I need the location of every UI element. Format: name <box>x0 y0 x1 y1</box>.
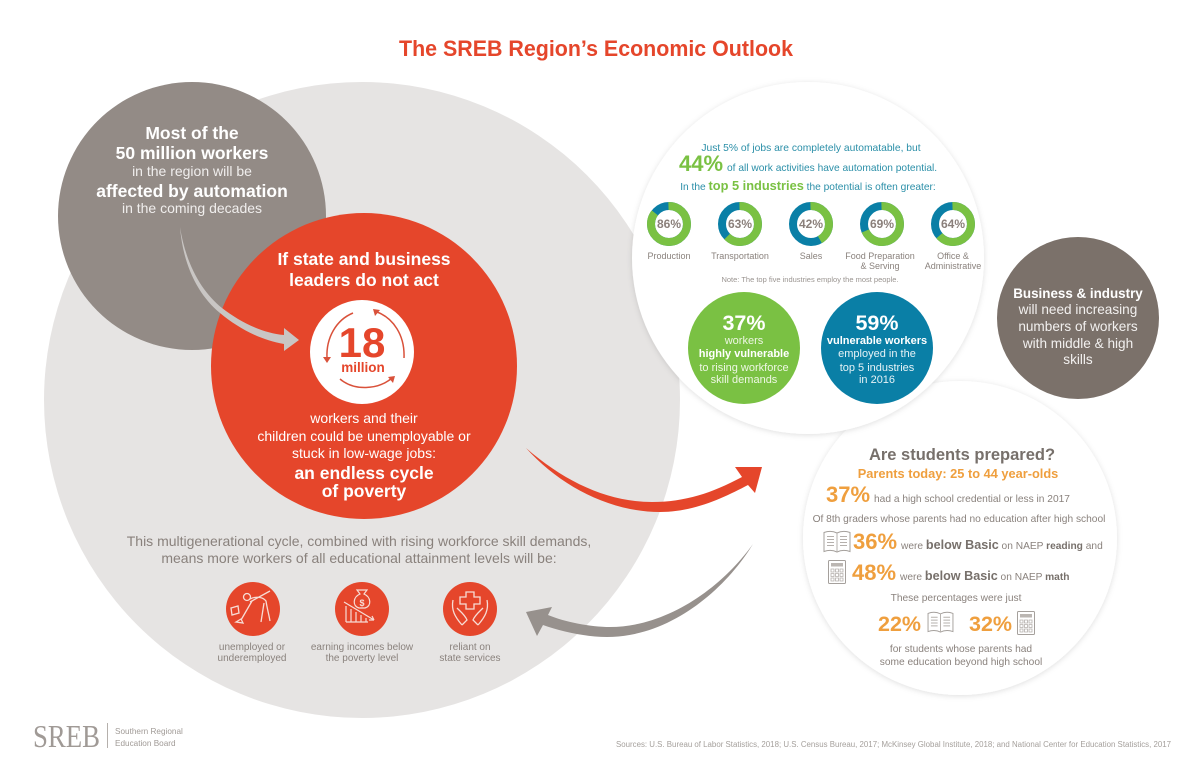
panel: if leaders do not act: workers and their <box>309 410 418 426</box>
logo: Education Board <box>115 739 176 748</box>
logo: Southern Regional <box>115 727 183 736</box>
label: state services <box>439 642 501 664</box>
donut: sales <box>793 206 829 261</box>
text block: multigenerational cycle: means more workers of all educational attainment levels will be: <box>161 550 557 566</box>
callout: 18 million: 18 <box>339 319 385 366</box>
callout: 18 million <box>310 300 414 404</box>
icon: unemployed or underemployed <box>226 582 280 636</box>
stat: 36 percent reading: were <box>900 541 926 552</box>
donut: production <box>647 206 691 261</box>
text: students whose parents: some education beyond high school <box>880 657 1042 668</box>
label: state services: reliant on <box>449 642 491 653</box>
stat circle: 37 percent: to rising workforce <box>699 362 789 374</box>
label: poverty level <box>311 642 414 664</box>
donut: production: Production <box>647 251 691 261</box>
stat circle: 37 percent: 37% <box>722 311 766 335</box>
text: 44 percent: of all work activities have automation potential. <box>727 163 937 174</box>
icon: incomes below poverty level <box>335 582 389 636</box>
panel: business and industry: numbers of workers <box>1018 319 1138 334</box>
panel: if leaders do not act: leaders do not act <box>289 270 439 290</box>
panel: if leaders do not act: an endless cycle <box>294 463 434 483</box>
panel: if leaders do not act <box>211 213 517 519</box>
panel: business and industry: with middle & high <box>1022 336 1133 351</box>
icon: reliant on state services <box>443 582 497 636</box>
text block: multigenerational cycle <box>127 533 591 566</box>
panel: are students prepared <box>803 381 1117 695</box>
stat circle: 59 percent <box>821 292 933 404</box>
donut: office and administrative: 64% <box>941 217 965 231</box>
panel: automation circle: in the region will be <box>132 163 252 179</box>
donut: production: 86% <box>657 217 681 231</box>
panel: if leaders do not act: stuck in low-wage jobs: <box>292 445 436 461</box>
stat circle: 59 percent: in 2016 <box>859 374 895 386</box>
label: unemployed: unemployed or <box>219 642 286 653</box>
text: 5 percent of jobs: Just 5% of jobs are completely automatable, but <box>701 143 921 154</box>
label: poverty level: the poverty level <box>326 653 398 664</box>
text: students whose parents: for students whose parents had <box>890 644 1032 655</box>
donut: food preparation: 69% <box>870 217 894 231</box>
text: 8th graders: Of 8th graders whose parents had no education after high school <box>813 514 1105 525</box>
label: unemployed: underemployed <box>218 653 286 664</box>
stat: 22 percent: 22% <box>878 612 921 636</box>
donut: sales: Sales <box>800 251 823 261</box>
stat circle: 59 percent: 59% <box>855 311 899 335</box>
logo <box>33 718 183 754</box>
stat: 48 percent math: were <box>899 572 925 583</box>
panel: business and industry: skills <box>1063 352 1093 367</box>
stat circle: 59 percent: vulnerable workers <box>827 335 927 347</box>
donut: office and administrative: Office & <box>937 251 969 261</box>
stat: 36 percent reading: 36% <box>853 529 897 554</box>
icon: calculator small <box>1018 612 1034 634</box>
text: students whose parents <box>880 644 1042 668</box>
panel: automation circle: 50 million workers <box>116 143 269 163</box>
stat: 37 percent credential: had a high school credential or less in 2017 <box>874 494 1070 505</box>
stat circle: 37 percent: skill demands <box>711 374 778 386</box>
stat: 48 percent math: 48% <box>852 560 896 585</box>
panel: automation circle: in the coming decades <box>122 200 262 216</box>
stat circle: 37 percent <box>688 292 800 404</box>
text: 44 percent: 44% <box>679 151 723 176</box>
panel: business and industry: will need increasing <box>1018 302 1137 317</box>
label: state services: state services <box>439 653 501 664</box>
donut: transportation: Transportation <box>711 251 769 261</box>
callout: 18 million: million <box>341 360 385 375</box>
donut: transportation: 63% <box>728 217 752 231</box>
text: these percentages: These percentages were just <box>891 593 1022 604</box>
icon: book small <box>928 612 953 632</box>
stat: 37 percent credential: 37% <box>826 482 870 507</box>
stat: 36 percent reading: below Basic on NAEP reading and <box>926 538 1103 552</box>
icon: book <box>824 531 850 552</box>
subheading: parents today: Parents today: 25 to 44 year-olds <box>858 466 1058 481</box>
title: The SREB Region’s Economic Outlook <box>399 36 794 61</box>
panel: business and industry <box>997 237 1159 399</box>
panel: if leaders do not act: children could be unemployable or <box>257 428 471 444</box>
label: unemployed <box>218 642 286 664</box>
large background circle <box>44 82 680 718</box>
label: poverty level: earning incomes below <box>311 642 414 653</box>
icon: calculator <box>828 560 846 584</box>
stat: 48 percent math: below Basic on NAEP math <box>925 569 1069 583</box>
arrow: gray to left <box>526 544 753 637</box>
donut: transportation <box>711 206 769 261</box>
panel: if leaders do not act: If state and business <box>277 249 451 269</box>
panel: automation circle <box>58 82 326 350</box>
text block: multigenerational cycle: This multigenerational cycle, combined with rising workforce skill demands, <box>127 533 591 549</box>
heading: are students prepared: Are students prepared? <box>869 446 1055 464</box>
stat circle: 37 percent: highly vulnerable <box>699 348 789 360</box>
panel: automation circle: Most of the <box>145 123 239 143</box>
stat circle: 59 percent: top 5 industries <box>840 362 915 374</box>
stat circle: 59 percent: employed in the <box>838 348 916 360</box>
logo: SREB <box>33 718 100 754</box>
donut: office and administrative <box>925 206 981 271</box>
icon: incomes below poverty level: $ <box>359 598 365 608</box>
donut: sales: 42% <box>799 217 823 231</box>
text: top 5 industries: In the top 5 industries the potential is often greater: <box>680 178 936 193</box>
donut: food preparation <box>845 206 915 271</box>
panel: if leaders do not act: of poverty <box>322 481 407 501</box>
panel: automation circle: affected by automation <box>96 181 288 201</box>
stat circle: 37 percent: workers <box>724 335 764 347</box>
arrow: red to right <box>526 448 762 512</box>
donut: food preparation: & Serving <box>860 261 900 271</box>
sources: Sources: U.S. Bureau of Labor Statistics, 2018; U.S. Census Bureau, 2017; McKinsey Global Institute, 2018; and National Center for Education Statistics, 2017 <box>616 740 1172 749</box>
donut: food preparation: Food Preparation <box>845 251 915 261</box>
panel: business and industry: Business & industry <box>1013 286 1143 301</box>
arrow: automation to red circle <box>180 227 299 351</box>
note: Note: The top five industries employ the most people. <box>721 275 899 284</box>
donut: office and administrative: Administrative <box>925 261 981 271</box>
stat: 32 percent: 32% <box>969 612 1012 636</box>
panel: automation potential <box>632 82 984 434</box>
